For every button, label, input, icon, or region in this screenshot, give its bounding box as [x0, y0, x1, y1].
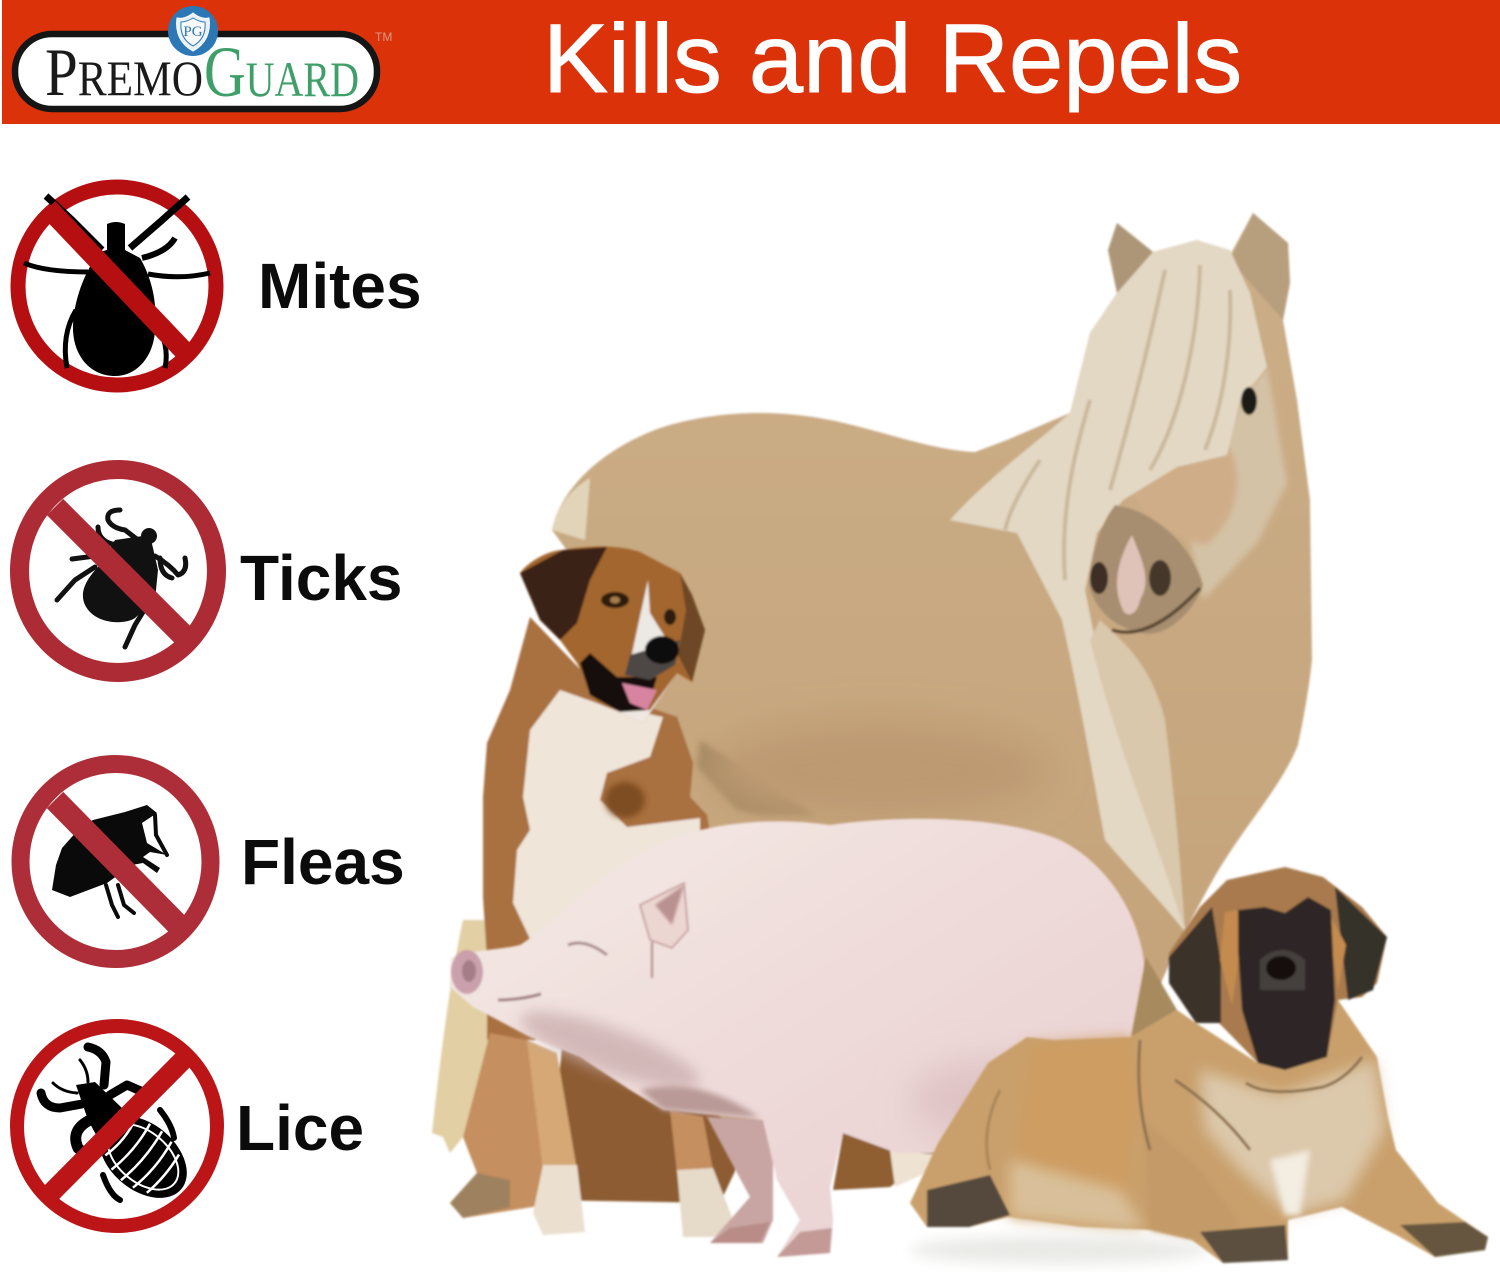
panel: ticks — [20, 470, 402, 672]
header band — [2, 0, 1500, 124]
label: Ticks: Ticks — [240, 542, 402, 614]
logo: PremoGuard: PREMO — [45, 34, 203, 110]
illustration: animals group — [432, 213, 1488, 1264]
horse mane tail behind dog — [432, 920, 492, 1153]
label: Lice: Lice — [236, 1092, 364, 1164]
icon: louse prohibited — [17, 1026, 217, 1226]
icon: mite prohibited — [18, 187, 216, 385]
animal: lying mastiff — [910, 867, 1488, 1263]
panel: mites — [18, 187, 422, 385]
animal: pig — [450, 819, 1146, 1257]
logo: PremoGuard: TM — [375, 30, 392, 44]
panel: lice — [17, 1026, 364, 1226]
icon: flea prohibited — [20, 764, 210, 959]
title: Kills and Repels — [543, 4, 1242, 113]
ground shadow — [910, 1236, 1210, 1264]
animal: horse — [552, 213, 1312, 1130]
animal: standing dog — [432, 546, 745, 1237]
panel: fleas — [20, 764, 405, 959]
logo: PremoGuard: GUARD — [204, 32, 359, 112]
label: Fleas: Fleas — [241, 826, 405, 898]
label: Mites: Mites — [258, 250, 422, 322]
logo: PremoGuard — [15, 6, 392, 112]
icon: tick prohibited — [20, 470, 216, 672]
logo: PremoGuard: PG — [183, 24, 203, 40]
